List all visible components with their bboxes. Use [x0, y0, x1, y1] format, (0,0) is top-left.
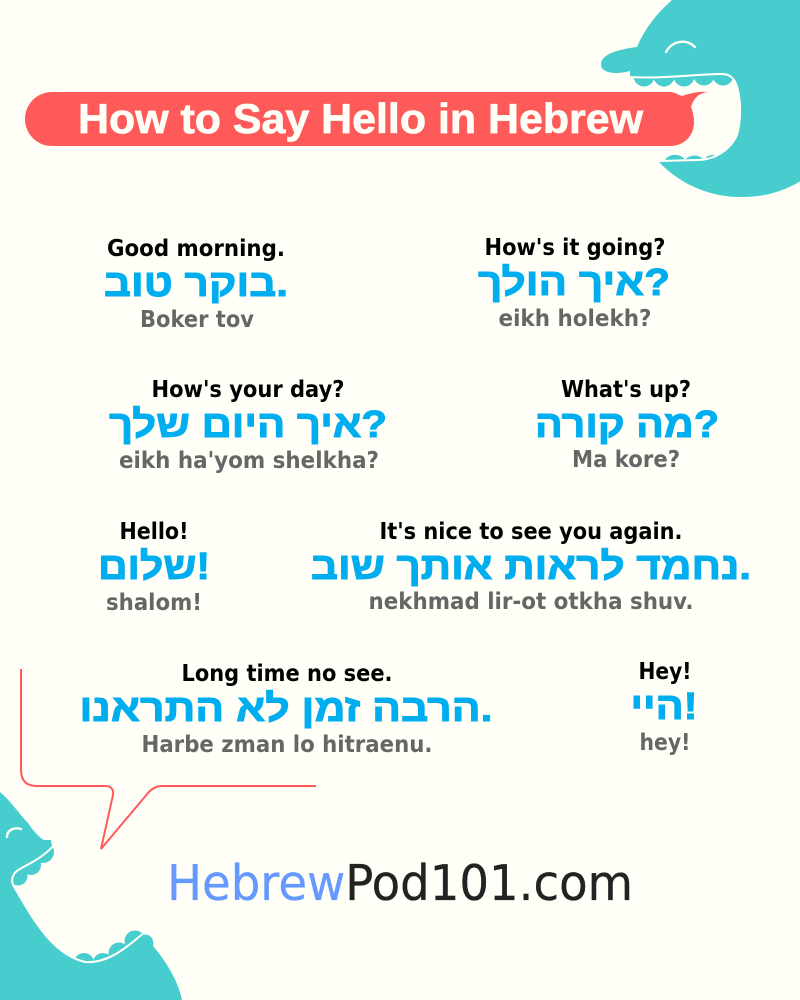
- phrase: how's your day: איך היום שלך?: [109, 404, 387, 446]
- phrase: nice to see you: nekhmad lir-ot otkha shuv.: [368, 589, 694, 615]
- title banner with tongue: [25, 92, 708, 146]
- phrase: nice to see you: It's nice to see you again.: [380, 519, 682, 545]
- phrase: how's it going: איך הולך?: [478, 262, 670, 304]
- phrase: good morning: Good morning.: [107, 236, 285, 262]
- phrase: hey: [630, 659, 698, 756]
- phrase: how's your day: How's your day?: [152, 377, 344, 403]
- character: top right teal monster: [601, 0, 800, 197]
- phrase: nice to see you: [311, 519, 751, 615]
- teeth: upper: [634, 64, 734, 86]
- teeth: lower: [665, 155, 718, 160]
- phrase: how's it going: eikh holekh?: [498, 306, 652, 332]
- phrase: how's it going: [478, 235, 670, 332]
- phrase: how's your day: eikh ha'yom shelkha?: [119, 448, 379, 474]
- character: bottom left teal monster: [0, 792, 182, 1000]
- phrase: what's up: מה קורה?: [535, 404, 719, 446]
- phrase: hello: [98, 519, 210, 616]
- phrase: long time no see: [80, 661, 493, 758]
- phrase: good morning: [104, 236, 288, 333]
- phrase: hey: Hey!: [638, 659, 692, 685]
- phrase: long time no see: Long time no see.: [182, 661, 392, 687]
- website logo: HebrewPod101.com: [167, 855, 633, 912]
- phrase: hello: שלום!: [98, 546, 210, 588]
- phrase: good morning: בוקר טוב.: [104, 263, 288, 305]
- teeth: lower: [74, 930, 146, 973]
- title: How to Say Hello in Hebrew: [78, 95, 643, 142]
- speech bubble outline: [21, 669, 316, 849]
- phrase: what's up: [535, 377, 719, 473]
- phrase: how's it going: How's it going?: [484, 235, 666, 261]
- phrase: long time no see: Harbe zman lo hitraenu.: [142, 732, 432, 758]
- phrase: long time no see: הרבה זמן לא התראנו.: [80, 688, 493, 730]
- phrase: hey: hey!: [640, 730, 690, 756]
- teeth: upper: [8, 841, 54, 886]
- eye: [666, 42, 695, 52]
- phrase: hello: shalom!: [106, 590, 202, 616]
- eye: [7, 828, 21, 837]
- phrase: hey: היי!: [630, 686, 698, 728]
- phrase: hello: Hello!: [120, 519, 188, 545]
- phrase: what's up: Ma kore?: [572, 447, 680, 473]
- phrase: good morning: Boker tov: [140, 307, 254, 333]
- body: [601, 0, 800, 197]
- phrase: nice to see you: נחמד לראות אותך שוב.: [311, 546, 751, 588]
- phrase: how's your day: [109, 377, 387, 474]
- phrase: what's up: What's up?: [561, 377, 691, 403]
- body: [0, 792, 182, 1000]
